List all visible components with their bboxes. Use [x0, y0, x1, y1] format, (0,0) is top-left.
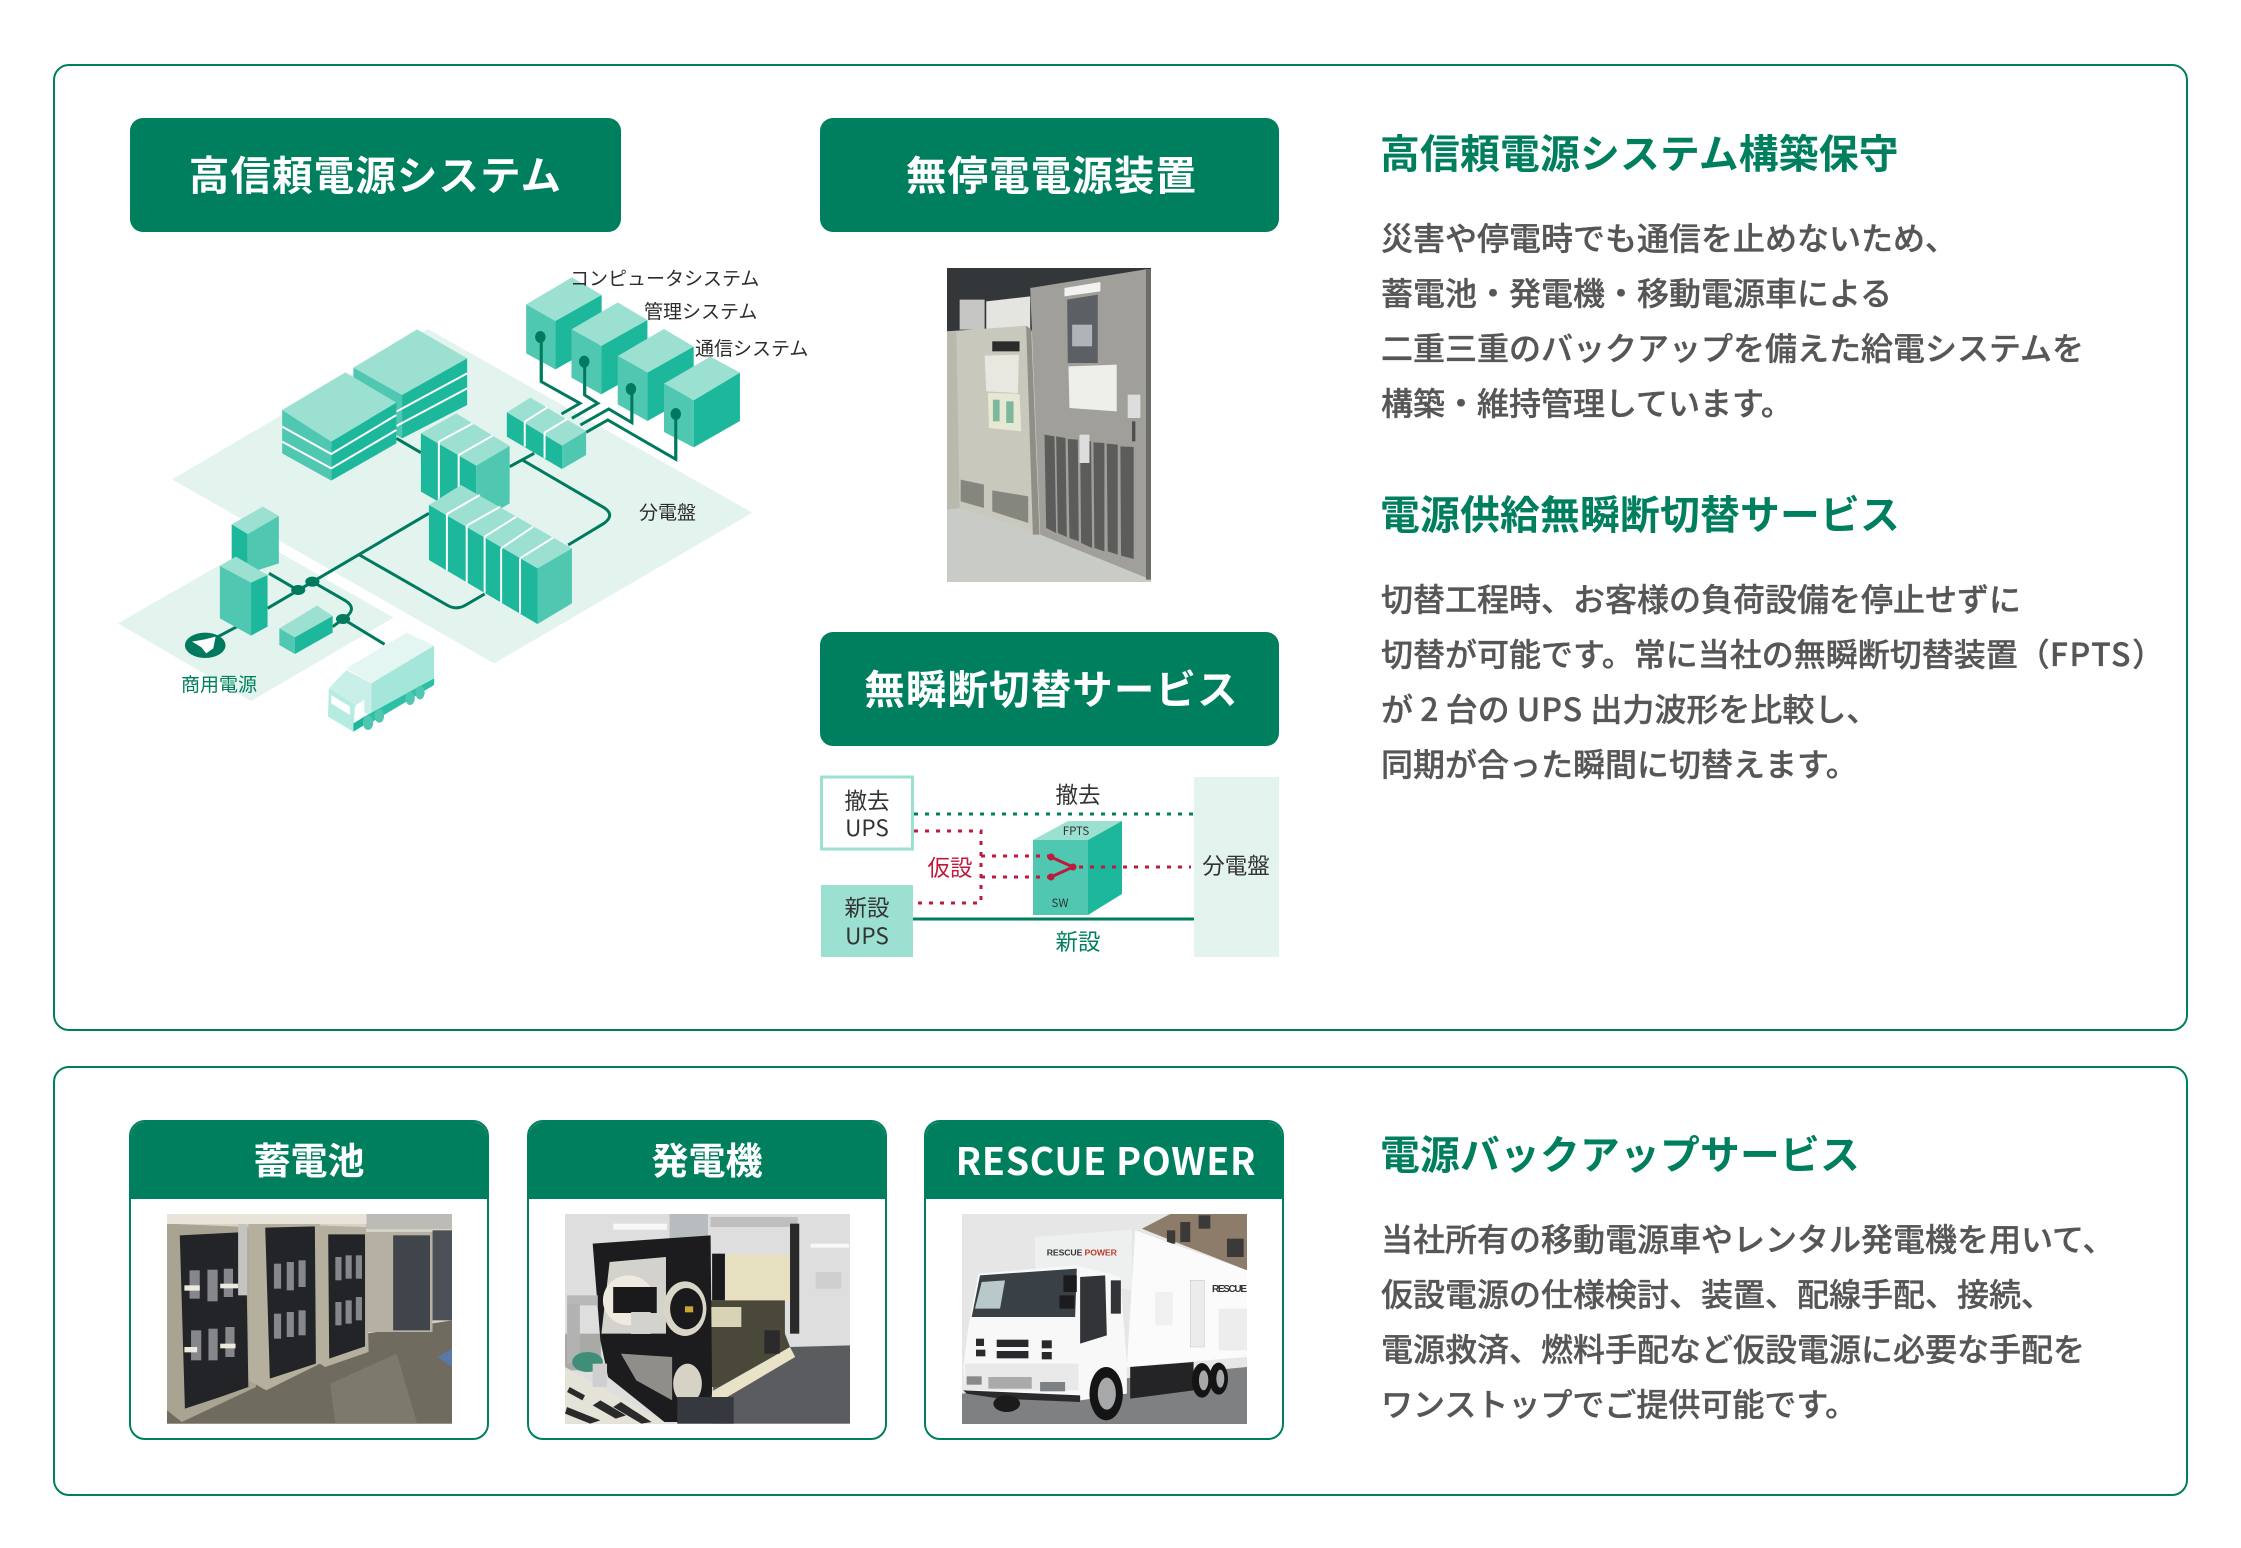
- text: backup service: 電源救済、燃料手配など仮設電源に必要な手配を: [1381, 1325, 2085, 1371]
- photo: power truck: [962, 1214, 1247, 1424]
- text: backup service: ワンストップでご提供可能です。: [1381, 1380, 1857, 1426]
- box: new UPS: [821, 885, 913, 957]
- heading: 高信頼電源システム: 高信頼電源システム: [189, 143, 562, 202]
- heading: backup service: 電源バックアップサービス: [1380, 1124, 1860, 1181]
- labels: UPS: [845, 919, 889, 951]
- diagram: uninterrupted switchover: [820, 776, 1279, 957]
- labels: 新設: [844, 891, 890, 923]
- card: battery: 蓄電池: [254, 1131, 364, 1185]
- box: old UPS: [822, 777, 912, 849]
- text: seamless switchover: が 2 台の UPS 出力波形を比較し、: [1381, 685, 1878, 731]
- heading: 無瞬断切替サービス: 無瞬断切替サービス: [864, 657, 1239, 716]
- heading: 高信頼電源システム: [130, 118, 621, 232]
- text: system construction: 二重三重のバックアップを備えた給電システムを: [1381, 324, 2084, 370]
- text: system construction: [1381, 214, 2084, 425]
- heading: 無停電電源装置: [820, 118, 1279, 232]
- labels: [844, 778, 1270, 957]
- text: system construction: 蓄電池・発電機・移動電源車による: [1381, 269, 1892, 315]
- labels: 仮設: [927, 851, 973, 883]
- text: seamless switchover: 切替工程時、お客様の負荷設備を停止せずに: [1381, 575, 2021, 621]
- labels: 新設: [1055, 925, 1101, 957]
- card: rescue power: RESCUE POWER: [956, 1131, 1256, 1186]
- text: seamless switchover: 同期が合った瞬間に切替えます。: [1381, 740, 1858, 786]
- text: backup service: 当社所有の移動電源車やレンタル発電機を用いて、: [1381, 1215, 2114, 1261]
- photo: power truck: RESCUE POWER: [1047, 1247, 1118, 1257]
- text: system construction: 災害や停電時でも通信を止めないため、: [1381, 214, 1957, 260]
- isometric power system diagram: [118, 278, 752, 732]
- text: backup service: 仮設電源の仕様検討、装置、配線手配、接続、: [1381, 1270, 2053, 1316]
- panel: high reliability power systems: [53, 64, 2188, 1031]
- label: コンピュータシステム: コンピュータシステム: [570, 264, 759, 291]
- card: generator: 発電機: [652, 1131, 762, 1185]
- text: seamless switchover: [1381, 575, 2164, 786]
- card: battery: [129, 1120, 489, 1440]
- photo: power truck: RESCUE: [1212, 1284, 1247, 1295]
- FPTS switch cube: FPTS: [1063, 823, 1089, 839]
- line: removed route: [914, 812, 1194, 816]
- labels: UPS: [845, 811, 889, 843]
- photo: generator: [565, 1214, 850, 1424]
- label: 通信システム: 通信システム: [695, 334, 808, 361]
- FPTS switch cube: SW: [1052, 895, 1068, 911]
- text: seamless switchover: 切替が可能です。常に当社の無瞬断切替装置（FPTS）: [1381, 630, 2164, 676]
- text: system construction: 構築・維持管理しています。: [1381, 379, 1793, 425]
- heading: seamless switchover: 電源供給無瞬断切替サービス: [1380, 484, 1900, 541]
- labels: 分電盤: [1202, 849, 1270, 881]
- heading: 無瞬断切替サービス: [820, 632, 1279, 746]
- FPTS switch cube: [1033, 821, 1122, 915]
- heading: 無停電電源装置: 無停電電源装置: [906, 143, 1197, 202]
- line: new route: [913, 918, 1194, 920]
- label: 管理システム: 管理システム: [644, 297, 757, 324]
- label: 分電盤: 分電盤: [639, 498, 696, 525]
- card: rescue power: [924, 1120, 1284, 1440]
- panel: backup service: [53, 1066, 2188, 1496]
- box: distribution board: [1194, 777, 1279, 957]
- label: 商用電源: 商用電源: [181, 670, 257, 697]
- card: generator: [527, 1120, 887, 1440]
- text: backup service: [1381, 1215, 2114, 1426]
- temporary route in red: [913, 831, 1191, 903]
- heading: system construction: 高信頼電源システム構築保守: [1380, 123, 1899, 180]
- photo: UPS cabinets: [947, 268, 1151, 582]
- photo: battery racks: [167, 1214, 452, 1424]
- labels: 撤去: [1055, 778, 1101, 810]
- labels: 撤去: [844, 784, 890, 816]
